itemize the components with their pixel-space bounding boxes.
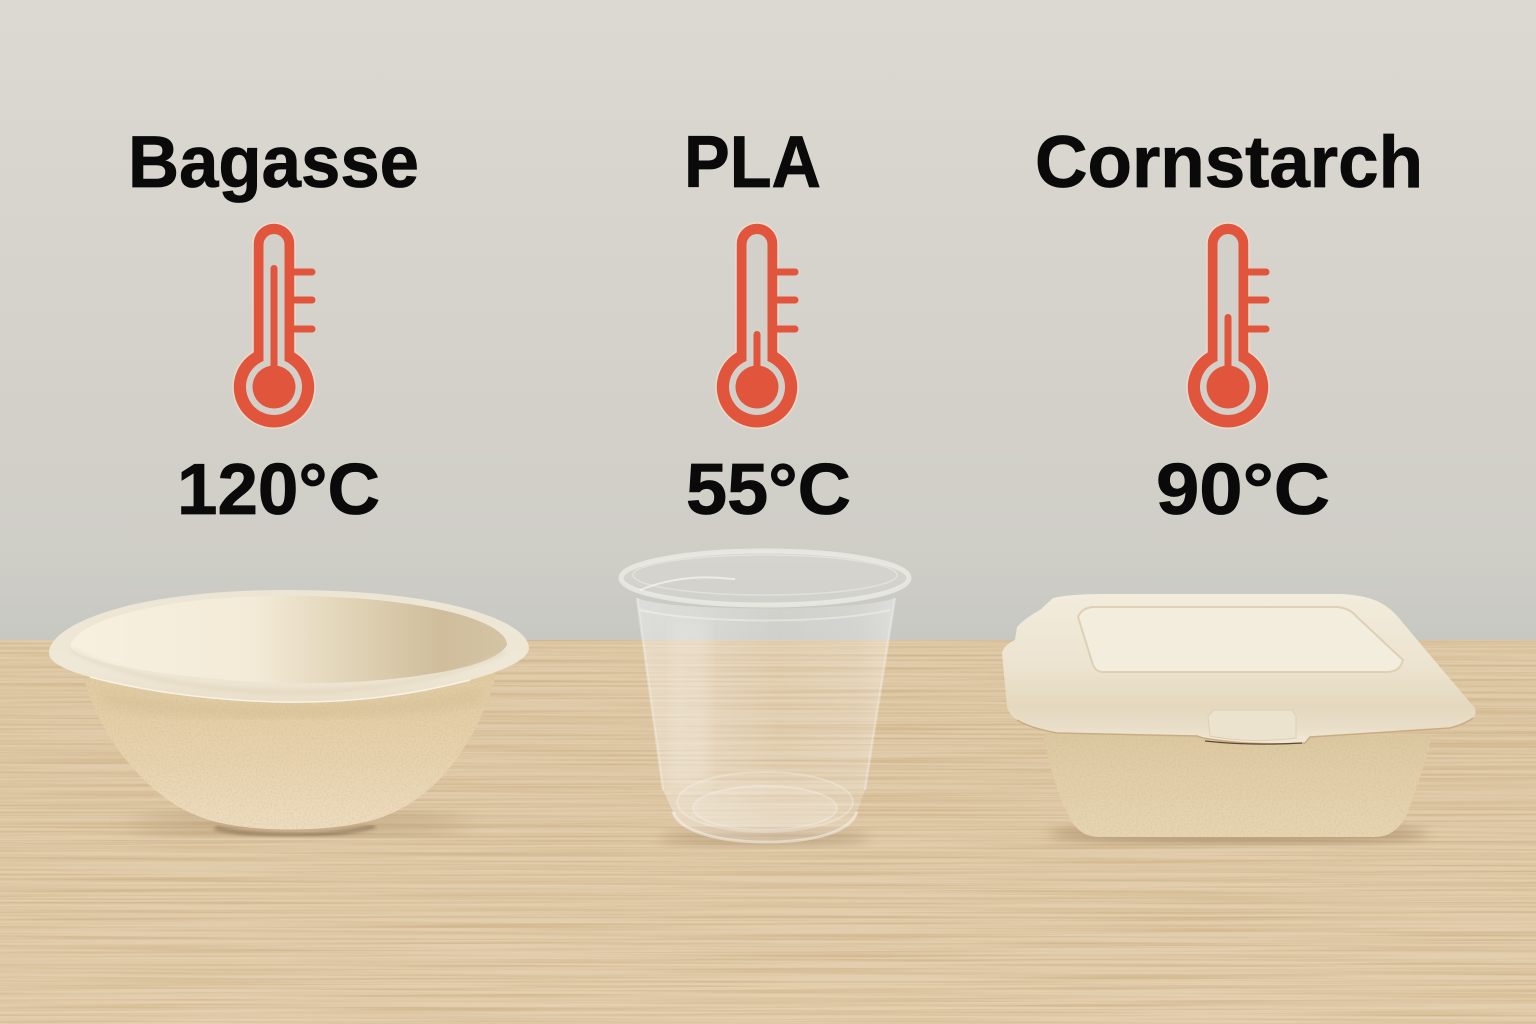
heading: PLA: PLA	[684, 122, 821, 203]
value: 55°C: 55°C	[686, 450, 851, 530]
heading: Bagasse: Bagasse	[128, 122, 419, 203]
icon: thermometer low	[716, 223, 798, 428]
column: Bagasse	[49, 122, 529, 836]
wall background	[0, 0, 1536, 641]
icon: thermometer high	[233, 223, 315, 428]
column: Cornstarch	[1002, 122, 1476, 844]
value: 120°C: 120°C	[177, 450, 380, 530]
product: bagasse bowl	[49, 590, 529, 836]
column: PLA	[621, 122, 909, 847]
product: cornstarch clamshell box	[1002, 594, 1476, 844]
lid tab	[1208, 710, 1296, 741]
value: 90°C: 90°C	[1156, 450, 1330, 530]
icon: thermometer medium	[1187, 223, 1269, 428]
wooden table	[0, 640, 1536, 1024]
product: clear PLA cup	[621, 551, 909, 847]
heading: Cornstarch: Cornstarch	[1035, 122, 1423, 203]
